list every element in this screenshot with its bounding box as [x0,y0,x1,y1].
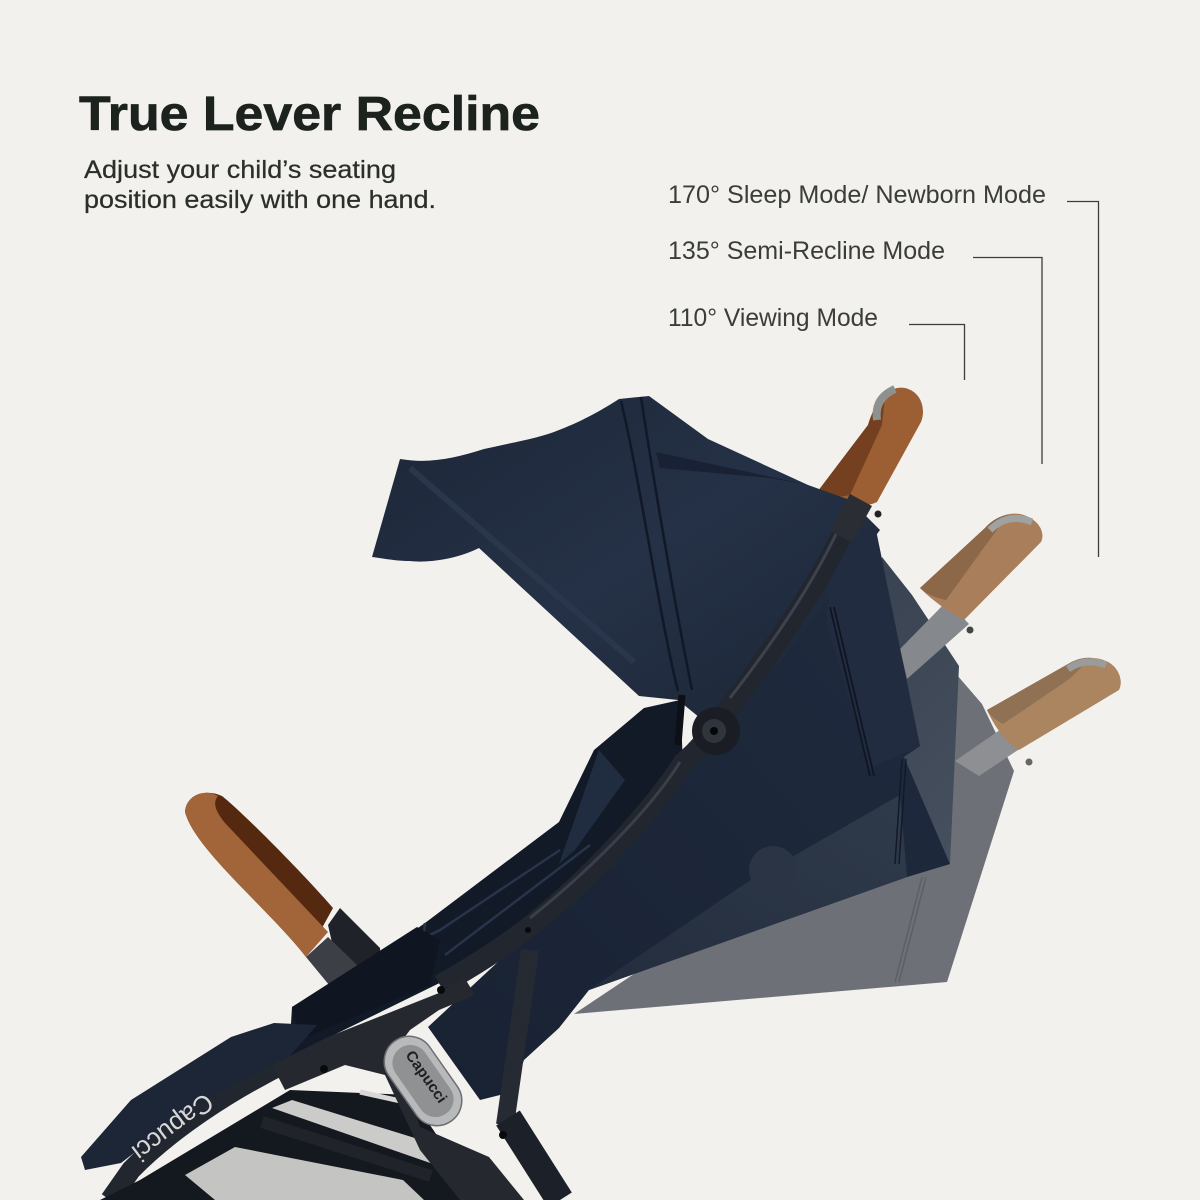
brand badge [374,1027,472,1135]
recline mode label: 135 degrees: 135° Semi-Recline Mode [668,237,945,265]
ghost seat: 110 degree position [574,658,1121,1014]
ghost seat: 135 degree position [589,514,1042,990]
description text [84,156,436,214]
seat interior [289,700,683,1057]
zipper pull [678,695,682,745]
brand badge: Capucci [402,1048,450,1106]
leg cushion and lower seat: Capucci [126,1087,219,1168]
faded lower seat [589,795,907,990]
leg cushion and lower seat [81,927,440,1170]
recline mode label: 135 degrees [668,237,1042,464]
canopy [372,396,920,776]
pivot knob [692,707,740,755]
basket mesh [100,1090,480,1200]
description text: position easily with one hand. [84,186,436,214]
title: True Lever Recline [79,88,540,141]
description text: Adjust your child’s seating [84,156,396,184]
ghost knob [749,846,797,894]
main frame tube [110,530,842,1200]
lower frame bracket [272,927,531,1200]
side pocket [826,525,920,770]
stroller illustration [81,388,1121,1200]
seat fabric [289,498,950,1100]
recline mode label: 170 degrees: 170° Sleep Mode/ Newborn Mode [668,181,1046,209]
recline mode label: 110 degrees [668,304,964,380]
recline mode label: 110 degrees: 110° Viewing Mode [668,304,878,332]
handle: front bumper [185,793,382,1000]
recline mode label: 170 degrees [668,181,1098,557]
tube collar [830,494,872,542]
handle: top position [818,388,923,518]
